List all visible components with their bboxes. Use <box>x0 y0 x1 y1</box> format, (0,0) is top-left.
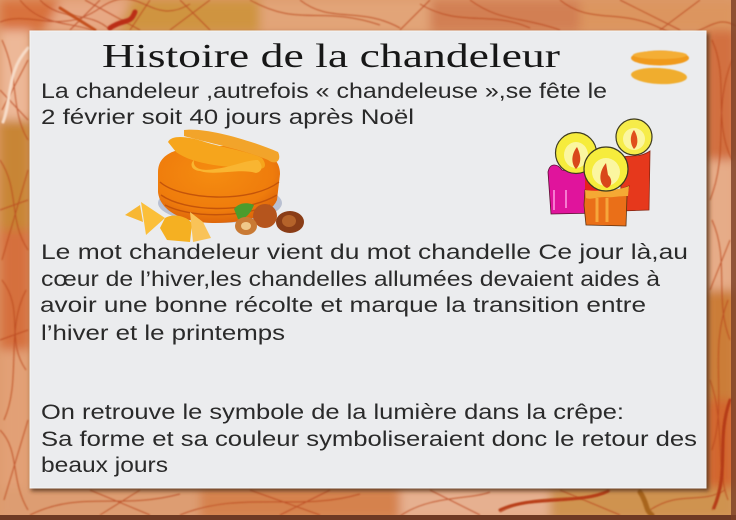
icon: two pancakes <box>631 50 689 85</box>
icon: three candles <box>548 119 652 226</box>
text block: symbol of light: Sa forme et sa couleur symboliseraient donc le retour des <box>41 428 697 451</box>
text block: symbol of light: On retrouve le symbole de la lumière dans la crêpe: <box>41 401 624 424</box>
text block: symbol of light <box>41 401 697 477</box>
text block: introduction <box>41 80 607 129</box>
text block: symbol of light: beaux jours <box>41 454 168 477</box>
title: Histoire de la chandeleur <box>102 38 561 75</box>
text block: origin of the word: Le mot chandeleur vient du mot chandelle Ce jour là,au <box>41 241 688 264</box>
icon: stack of crepes <box>125 130 304 242</box>
text block: introduction: La chandeleur ,autrefois « chandeleuse »,se fête le <box>41 80 607 103</box>
text block: introduction: 2 février soit 40 jours après Noël <box>41 106 414 129</box>
text block: origin of the word <box>40 241 688 345</box>
text block: origin of the word: cœur de l’hiver,les chandelles allumées devaient aides à <box>41 268 660 291</box>
text block: origin of the word: avoir une bonne récolte et marque la transition entre <box>40 294 646 317</box>
text block: origin of the word: l’hiver et le printemps <box>41 322 285 345</box>
